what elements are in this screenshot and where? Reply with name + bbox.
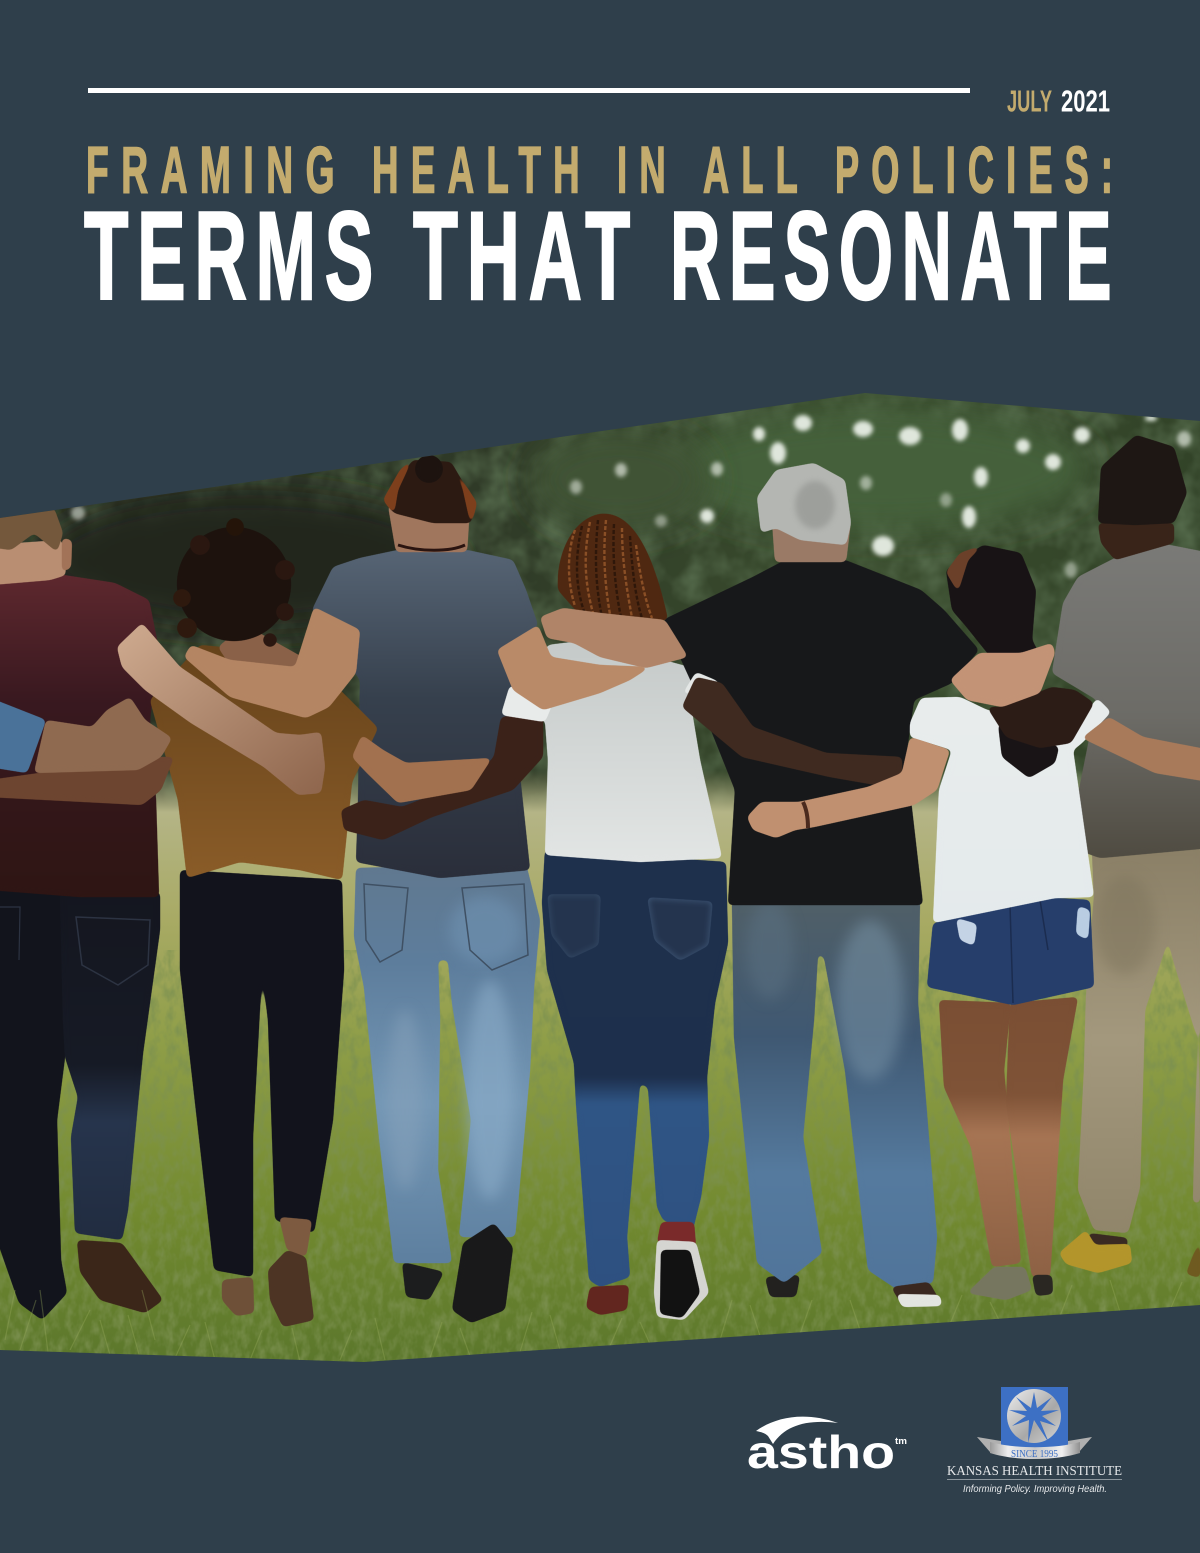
arm: person 5 right arm and hand <box>950 643 1055 707</box>
logo: Kansas Health Institute <box>947 1387 1122 1495</box>
person 6: dark hair and ponytail <box>946 545 1059 778</box>
arm: far left forearm, underside <box>0 757 174 805</box>
arm: person 5 left arm and hand <box>540 608 688 668</box>
person 6: white tee <box>910 697 1111 923</box>
title: gold line: IN <box>617 133 678 206</box>
person 2: upper back skin <box>220 634 298 666</box>
arm: person 6 left arm with bracelet <box>747 737 950 838</box>
person 2: brown shirt <box>150 645 378 880</box>
grass <box>0 770 1200 1370</box>
emblem: blue square with star <box>1001 1387 1068 1448</box>
person 3: light jeans and shoes <box>354 864 540 1323</box>
tree backdrop <box>0 385 1200 825</box>
sleeve: person 4 left sleeve <box>501 685 552 722</box>
sleeve: person 4 right sleeve <box>685 673 718 694</box>
title: white line: TERMS <box>84 187 382 326</box>
arm: person 4 dark arm across person 5 <box>682 677 902 785</box>
arm: person 3 left arm over person 2 <box>184 607 360 718</box>
person 7: head <box>1098 435 1187 560</box>
photo: group with arms around each other <box>0 385 1200 1370</box>
title: gold line <box>86 133 1125 206</box>
logo: astho: tm <box>895 1436 907 1446</box>
arm: person 2 arm behind person 3 <box>352 735 492 803</box>
arm: person 1 arm and hand across person 2 <box>117 623 325 795</box>
person 5: gray hair and neck <box>757 463 851 562</box>
arm: person 7 dark arm <box>987 687 1094 748</box>
person 4: dark blue jeans and sneakers <box>542 850 728 1320</box>
person 7: khaki pants and shoes <box>1059 846 1200 1278</box>
foreground grass blades <box>5 1280 1182 1362</box>
arm: person 4 dark arm behind person 3 <box>341 713 543 840</box>
person 5: worn jeans and shoes <box>732 900 942 1307</box>
title: white line: THAT <box>413 187 639 326</box>
logo: astho: astho <box>747 1426 895 1478</box>
arm: far left denim sleeve and hand <box>0 697 172 773</box>
title: gold line: HEALTH <box>372 133 592 206</box>
person 1: head <box>0 508 72 585</box>
person 1: dark jeans and boots <box>0 888 163 1320</box>
tagline: Informing Policy. Improving Health. <box>963 1483 1107 1495</box>
ribbon <box>977 1437 1092 1460</box>
top rule <box>88 88 970 93</box>
person 6: denim shorts, legs and shoes <box>927 898 1094 1300</box>
title: gold line: FRAMING <box>86 133 347 206</box>
person 3: blue-gray tee <box>312 550 538 878</box>
person 2: black leggings and shoes <box>180 870 344 1327</box>
arm: person 3 right arm over person 4 <box>497 625 650 710</box>
person 5: black polo <box>663 557 979 905</box>
organization name: KANSAS HEALTH INSTITUTE <box>947 1464 1122 1479</box>
person 2: curly hair <box>173 518 295 647</box>
person 4: braided hair <box>558 514 668 620</box>
title: gold line: ALL <box>703 133 810 206</box>
person 3: neck and hair bun <box>383 455 477 552</box>
person 4: white tee <box>544 642 722 862</box>
since 1995: SINCE 1995 <box>1011 1448 1058 1460</box>
date: JULY <box>1007 84 1052 118</box>
person 1: maroon shirt <box>0 573 159 897</box>
arm: person 6 right arm <box>1082 717 1200 782</box>
date: 2021 <box>1061 84 1110 118</box>
title: white line <box>84 187 1120 326</box>
logo: astho <box>747 1417 907 1478</box>
person 7: gray tee <box>1052 543 1200 858</box>
